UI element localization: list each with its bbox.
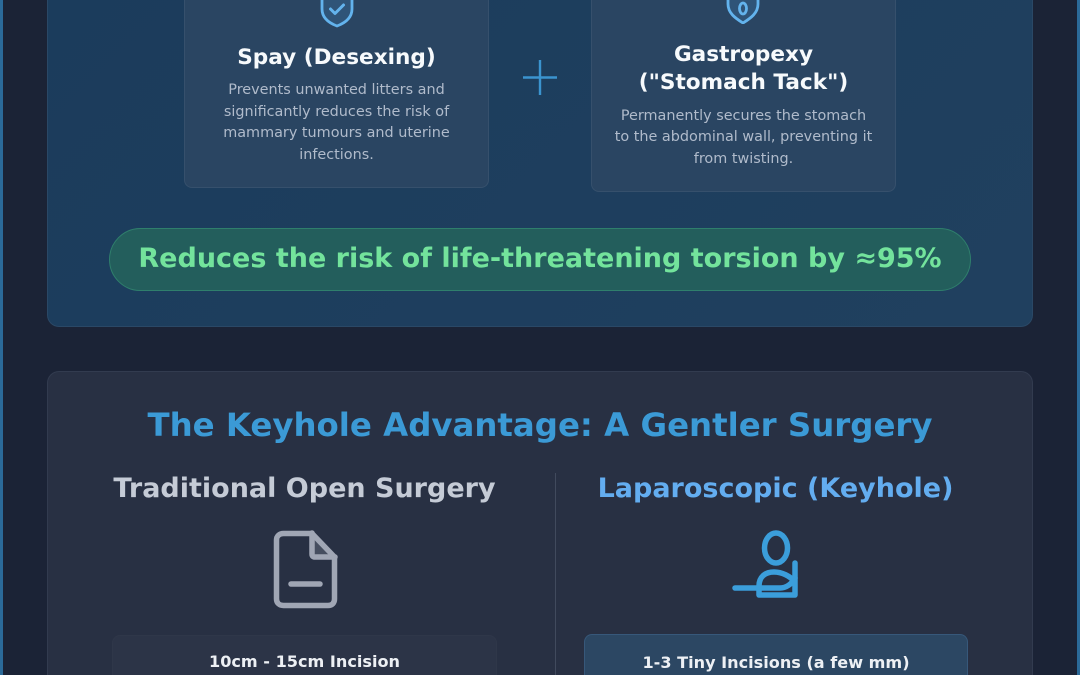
text: spay description: Prevents unwanted litters and [228, 82, 445, 98]
icon: laparoscopic person [732, 530, 798, 598]
text: laparoscopic incision size: 1-3 Tiny Incisions (a few mm) [642, 653, 910, 672]
title: keyhole advantage: The Keyhole Advantage: A Gentler Surgery [147, 406, 933, 444]
panel: the keyhole advantage [47, 371, 1033, 675]
card: gastropexy [591, 0, 896, 192]
text: spay description: infections. [299, 147, 374, 163]
callout: torsion risk reduction [109, 228, 971, 291]
left edge accent strip [0, 0, 3, 675]
text: gastropexy description: to the abdominal wall, preventing it [615, 129, 872, 145]
card: spay [184, 0, 489, 188]
heading: laparoscopic keyhole: Laparoscopic (Keyhole) [598, 472, 953, 504]
card: traditional incision [112, 635, 497, 675]
text: spay description: mammary tumours and uterine [223, 125, 450, 141]
text: gastropexy description: from twisting. [694, 151, 793, 167]
icon: shield with check [320, 0, 354, 28]
heading: gastropexy: ("Stomach Tack") [639, 70, 848, 95]
heading: gastropexy [639, 42, 848, 95]
right edge accent strip [1077, 0, 1080, 675]
icon: shield with droplet [726, 0, 760, 24]
text: spay description [223, 82, 450, 163]
panel: combined spay and gastropexy procedure [47, 0, 1033, 327]
heading: gastropexy: Gastropexy [674, 42, 813, 67]
icon: plus sign [523, 60, 557, 95]
divider between columns [555, 473, 556, 675]
text: gastropexy description [615, 108, 872, 167]
text: spay description: significantly reduces the risk of [224, 104, 449, 120]
callout text: Reduces the risk of life-threatening torsion by ≈95% [138, 243, 942, 274]
icon: document with minus [274, 530, 338, 608]
heading: spay: Spay (Desexing) [237, 45, 436, 70]
text: traditional incision size: 10cm - 15cm Incision [209, 652, 400, 671]
heading: traditional open surgery: Traditional Open Surgery [113, 472, 496, 504]
text: gastropexy description: Permanently secures the stomach [621, 108, 866, 124]
card: laparoscopic incisions [584, 634, 968, 675]
